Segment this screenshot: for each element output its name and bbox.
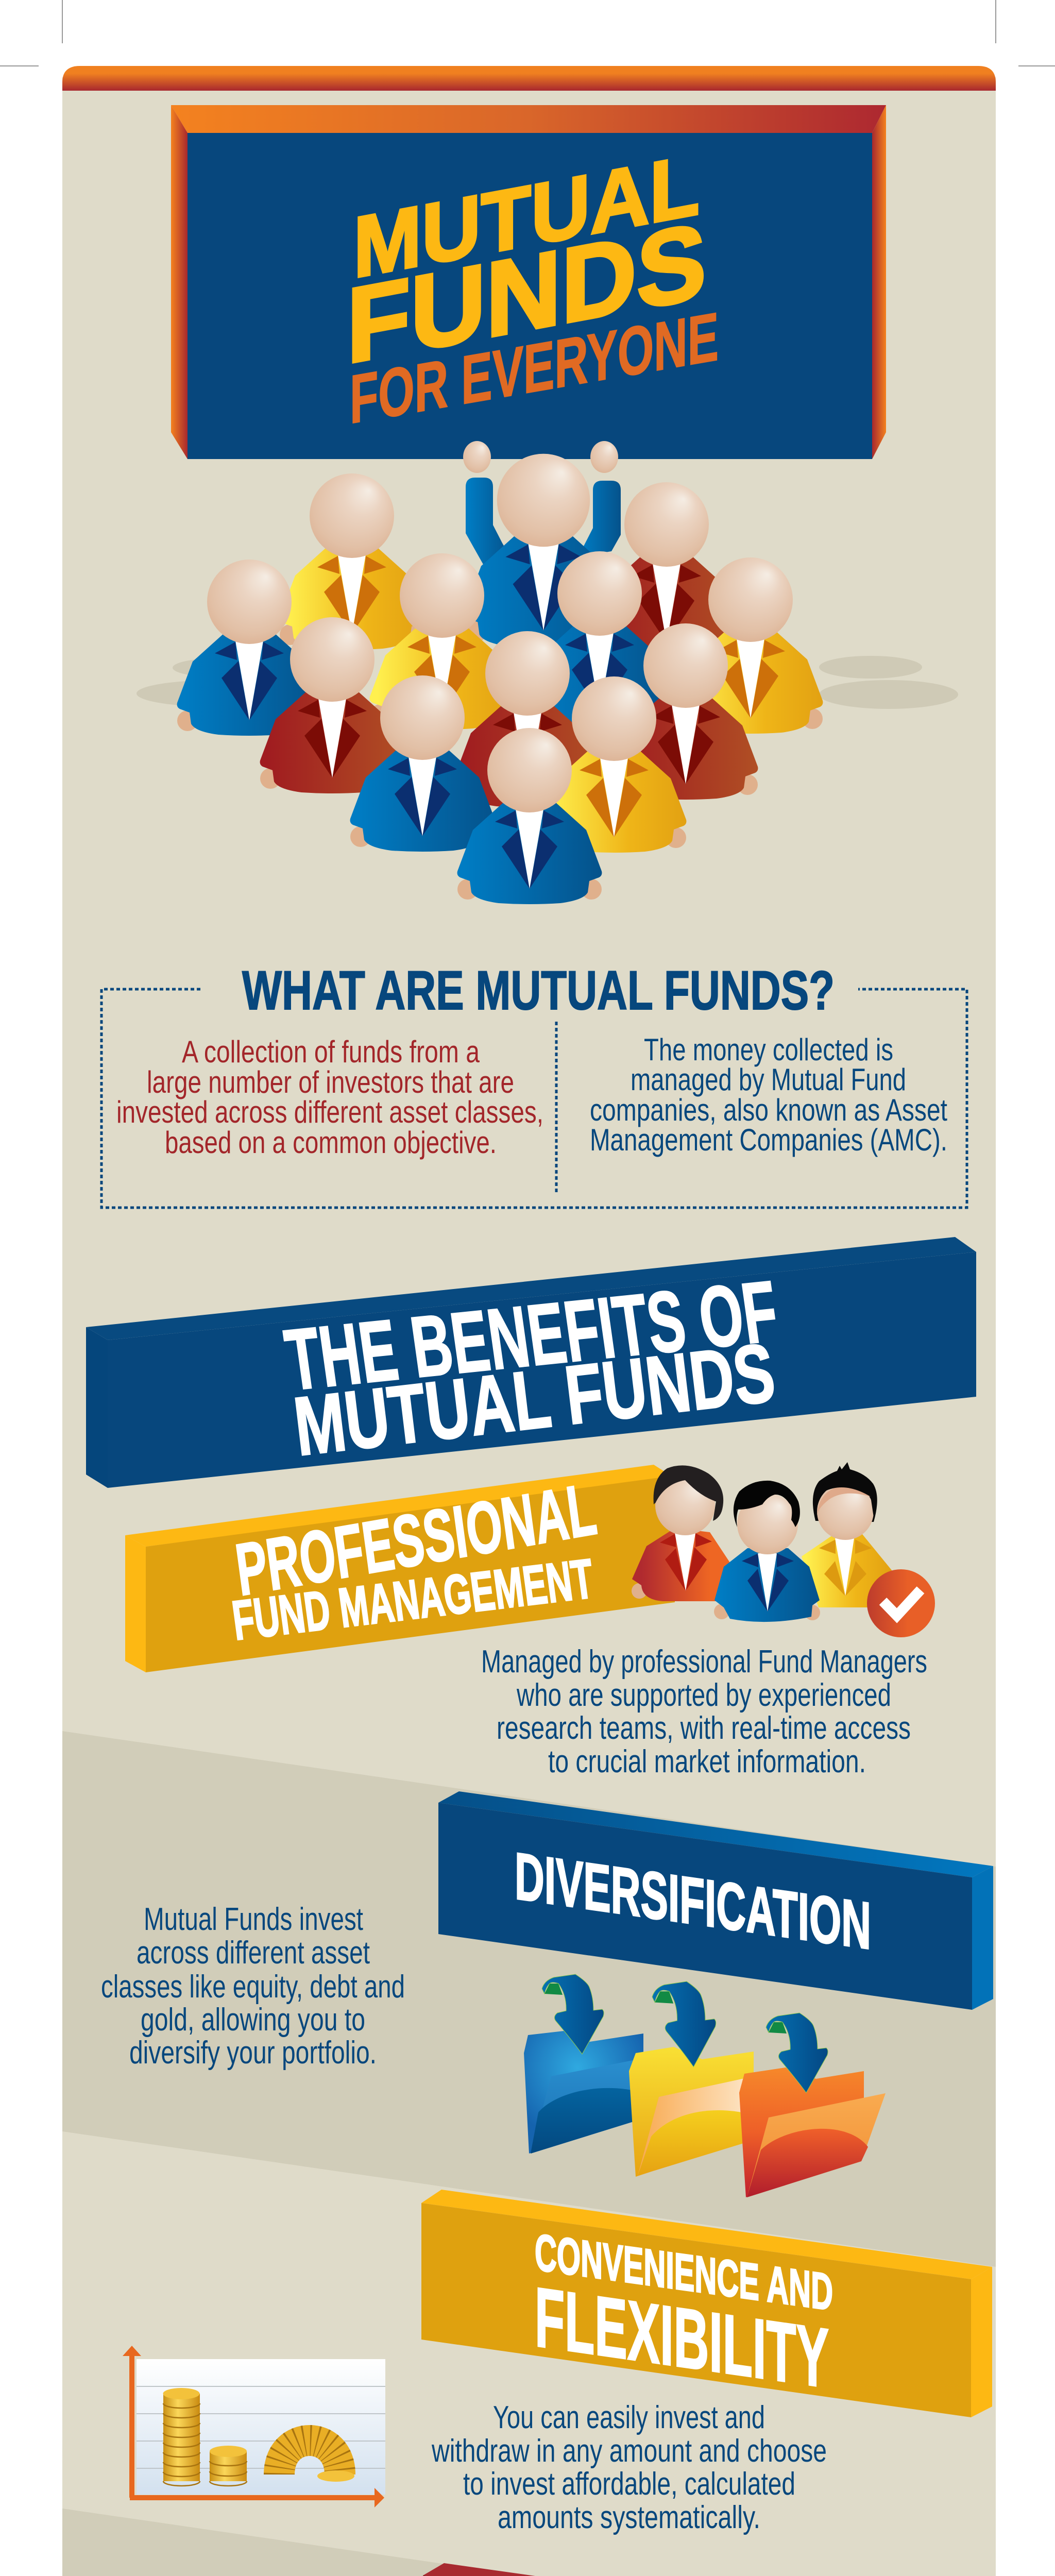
dotted frame [101,989,967,1208]
coin stack short [210,2446,247,2486]
arrow 1 [542,1974,604,2054]
text: diversification: classes like equity, debt and [101,1969,405,2005]
text: management: Management Companies (AMC). [590,1123,947,1157]
banner text [535,2223,833,2405]
text: management: managed by Mutual Fund [631,1062,906,1097]
manager: blue [714,1481,820,1622]
person: red third row left [260,617,404,793]
text: professional management: who are supported by experienced [516,1677,891,1713]
text: definition: based on a common objective. [165,1125,497,1160]
illustration: crowd of investors [177,441,823,904]
person: blue front [457,728,602,904]
banner text: CONVENIENCE AND [535,2223,833,2321]
banner: transparent and well regulated [423,2563,994,2576]
manager: yellow [802,1462,892,1607]
text: diversification: across different asset [137,1935,370,1971]
banner text: FLEXIBILITY [535,2269,829,2405]
heading: what are mutual funds: WHAT ARE MUTUAL FUNDS? [242,959,835,1021]
text: convenience: withdraw in any amount and choose [431,2433,827,2469]
person: yellow back left [280,473,424,650]
person: yellow second row [370,553,514,730]
person: red third row middle [455,631,600,807]
person: red back right [594,482,739,658]
text: convenience [431,2400,827,2535]
text: diversification: Mutual Funds invest [144,1902,363,1937]
text: convenience: to invest affordable, calculated [463,2466,795,2502]
title: mutual funds for everyone: FOR EVERYONE [350,298,719,438]
banner: diversification [438,1791,993,2010]
person: yellow fourth row [542,676,686,853]
banner: convenience and flexibility [421,2190,992,2417]
axes [130,2354,376,2498]
arrow 2 [652,1981,716,2067]
text: professional management: research teams, with real-time access [497,1710,911,1746]
text: convenience: You can easily invest and [493,2400,765,2435]
person: blue left [177,560,321,736]
banner: professional fund management [125,1465,675,1672]
person: red third row right [614,623,758,800]
band: transparent section [62,2509,996,2576]
chart: coin growth [123,2346,385,2507]
text: professional management [481,1644,927,1780]
person: blue fourth row [350,675,495,852]
person: blue second row [528,551,672,727]
coin stack tall [163,2388,200,2486]
text: management: companies, also known as Asset [590,1093,947,1127]
text: definition: large number of investors that are [147,1065,514,1099]
arrow 3 [766,2013,828,2093]
text: professional management: Managed by professional Fund Managers [481,1644,927,1680]
banner text [229,1468,601,1652]
person: blue with raised arms [463,441,623,648]
text: definition: invested across different asset classes, [116,1095,543,1129]
text: definition: A collection of funds from a [182,1035,480,1069]
icon: fund managers [632,1462,935,1637]
folder: orange [739,2067,886,2197]
top bar [62,66,996,91]
icon: check badge [867,1569,935,1637]
text: diversification [101,1902,405,2071]
person: yellow right [678,557,823,734]
title board [171,105,886,459]
icon: folders with arrows [524,1974,886,2197]
ground shadows [137,656,958,709]
heading text: MUTUAL FUNDS [290,1326,779,1473]
title: mutual funds for everyone [347,136,719,438]
folder: yellow [629,2047,754,2177]
title: mutual funds for everyone: MUTUAL [353,136,700,296]
text: convenience: amounts systematically. [498,2500,760,2535]
text: professional management: to crucial market information. [548,1744,866,1780]
text: management: The money collected is [644,1032,893,1067]
text: management [590,1032,947,1157]
heading text: THE BENEFITS OF [280,1263,783,1409]
banner text: PROFESSIONAL [231,1468,601,1612]
banner: the benefits of mutual funds [86,1237,976,1488]
text: diversification: diversify your portfolio. [129,2035,377,2071]
folder: blue [524,2031,643,2154]
coin arch [279,2441,354,2482]
heading text [280,1263,783,1473]
text: definition [116,1035,543,1160]
text: diversification: gold, allowing you to [141,2002,365,2038]
banner text: FUND MANAGEMENT [229,1547,597,1652]
title: mutual funds for everyone: FUNDS [347,201,706,386]
manager: red [632,1465,730,1601]
band: diversification section [62,1731,996,2267]
